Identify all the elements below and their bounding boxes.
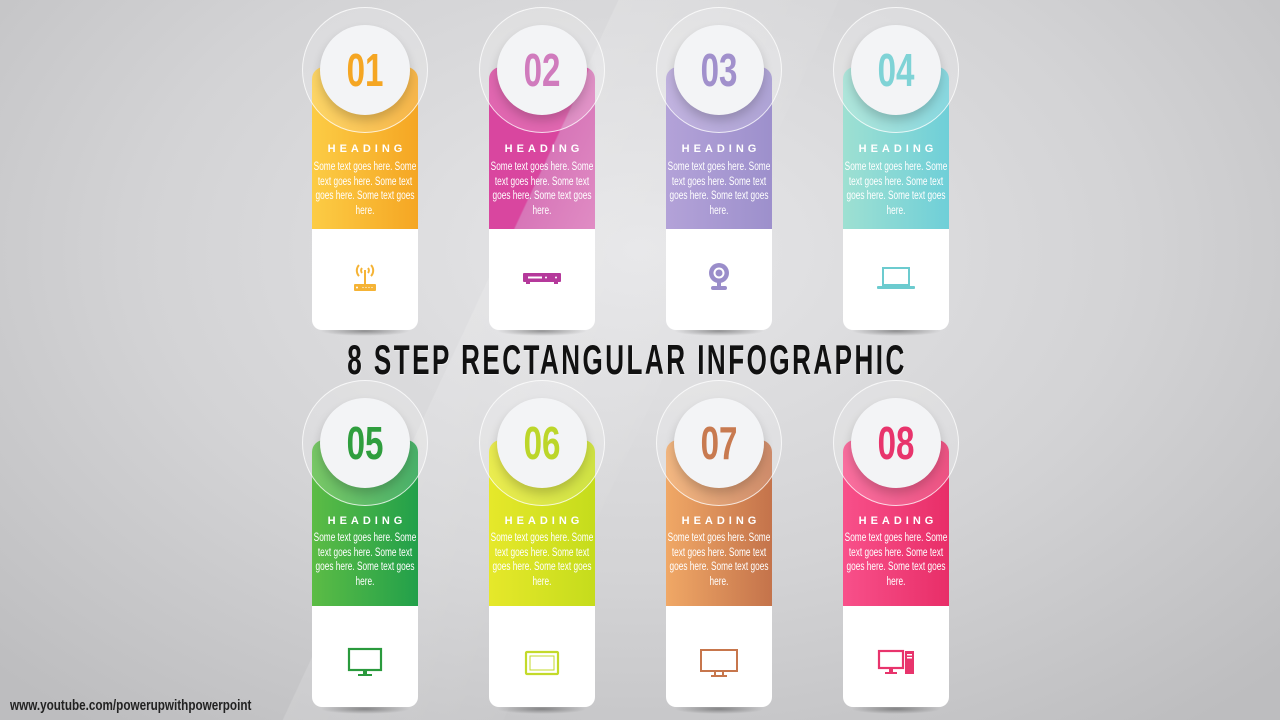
card 08	[833, 380, 959, 714]
circle number 07: 07	[701, 417, 737, 469]
text 06	[491, 532, 593, 588]
icon: desktop pc	[878, 650, 914, 674]
card 02	[479, 7, 605, 336]
text 06: Some text goes here. Some	[491, 532, 593, 544]
text 02: here.	[533, 205, 551, 217]
text 08: goes here. Some text goes	[847, 561, 945, 573]
icon: set-top box	[523, 273, 561, 284]
circle number 04: 04	[878, 44, 914, 96]
card 07	[656, 380, 782, 714]
text 03: here.	[710, 205, 728, 217]
circle number 06: 06	[524, 417, 560, 469]
title: 8 STEP RECTANGULAR INFOGRAPHIC	[347, 336, 907, 383]
circle number 08: 08	[878, 417, 914, 469]
circle number 07	[656, 380, 782, 506]
icon: tv	[700, 649, 738, 677]
text 05: goes here. Some text goes	[316, 561, 414, 573]
text 02: goes here. Some text goes	[493, 190, 591, 202]
heading 02: HEADING	[505, 143, 583, 155]
circle number 01: 01	[347, 44, 383, 96]
icon: tablet	[524, 650, 560, 676]
text 04: goes here. Some text goes	[847, 190, 945, 202]
text 07: text goes here. Some text	[672, 547, 766, 559]
circle number 06	[479, 380, 605, 506]
text 05: text goes here. Some text	[318, 547, 412, 559]
text 04: text goes here. Some text	[849, 176, 943, 188]
text 07: Some text goes here. Some	[668, 532, 770, 544]
text 08: Some text goes here. Some	[845, 532, 947, 544]
circle number 04	[833, 7, 959, 133]
card 06	[479, 380, 605, 714]
text 03	[668, 161, 770, 217]
text 05: here.	[356, 576, 374, 588]
text 08	[845, 532, 947, 588]
circle number 02: 02	[524, 44, 560, 96]
circle number 08	[833, 380, 959, 506]
heading 05: HEADING	[328, 515, 406, 527]
text 03: Some text goes here. Some	[668, 161, 770, 173]
text 04: Some text goes here. Some	[845, 161, 947, 173]
text 01: here.	[356, 205, 374, 217]
heading 07: HEADING	[682, 515, 760, 527]
text 06: goes here. Some text goes	[493, 561, 591, 573]
icon: webcam	[709, 263, 729, 290]
text 07: here.	[710, 576, 728, 588]
text 04: here.	[887, 205, 905, 217]
text 06: here.	[533, 576, 551, 588]
text 07	[668, 532, 770, 588]
text 08: text goes here. Some text	[849, 547, 943, 559]
text 02: Some text goes here. Some	[491, 161, 593, 173]
text 05: Some text goes here. Some	[314, 532, 416, 544]
text 08: here.	[887, 576, 905, 588]
heading 01: HEADING	[328, 143, 406, 155]
circle number 03	[656, 7, 782, 133]
circle number 05	[302, 380, 428, 506]
circle number 03: 03	[701, 44, 737, 96]
card 05	[302, 380, 428, 714]
text 05	[314, 532, 416, 588]
text 03: goes here. Some text goes	[670, 190, 768, 202]
heading 03: HEADING	[682, 143, 760, 155]
icon: monitor	[348, 648, 382, 676]
text 06: text goes here. Some text	[495, 547, 589, 559]
heading 04: HEADING	[859, 143, 937, 155]
circle number 02	[479, 7, 605, 133]
circle number 05: 05	[347, 417, 383, 469]
circle number 01	[302, 7, 428, 133]
card 04	[833, 7, 959, 336]
icon: router	[354, 264, 376, 291]
text 04	[845, 161, 947, 217]
text 01: goes here. Some text goes	[316, 190, 414, 202]
heading 06: HEADING	[505, 515, 583, 527]
url footer: www.youtube.com/powerupwithpowerpoint	[10, 697, 251, 714]
text 02	[491, 161, 593, 217]
card 01	[302, 7, 428, 336]
card 03	[656, 7, 782, 336]
heading 08: HEADING	[859, 515, 937, 527]
text 02: text goes here. Some text	[495, 176, 589, 188]
text 01	[314, 161, 416, 217]
text 01: Some text goes here. Some	[314, 161, 416, 173]
text 03: text goes here. Some text	[672, 176, 766, 188]
text 07: goes here. Some text goes	[670, 561, 768, 573]
text 01: text goes here. Some text	[318, 176, 412, 188]
icon: laptop	[877, 267, 915, 289]
